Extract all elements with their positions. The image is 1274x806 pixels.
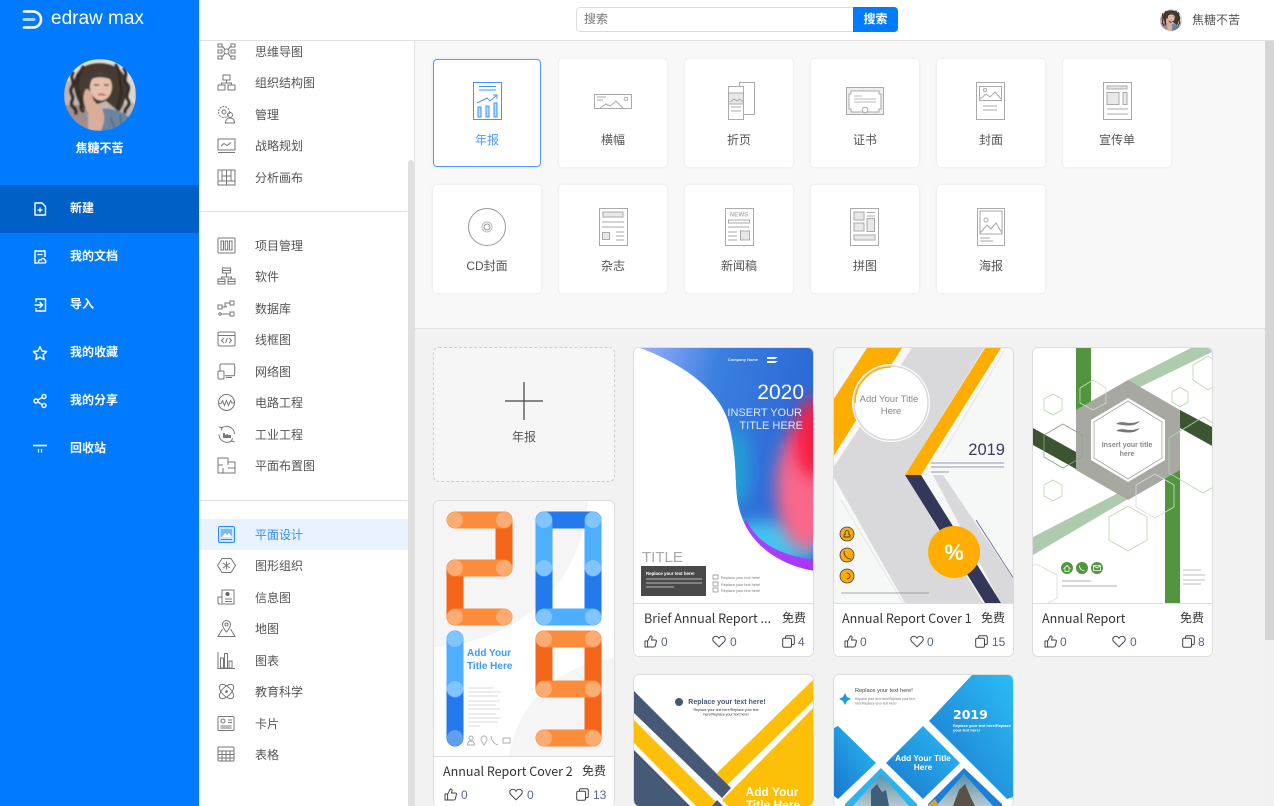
heart icon — [910, 636, 924, 648]
type card: collage: 拼图 — [853, 259, 877, 273]
poster: blue diamonds: here!Replace your text here! — [855, 702, 897, 706]
menu item: new (active): 新建 — [70, 201, 94, 215]
poster: gradient cover: TITLE — [642, 549, 683, 566]
nav item: charts: 图表 — [255, 654, 279, 668]
menu item: recycle bin: 回收站 — [70, 441, 106, 455]
poster: gradient cover: Replace your text here! — [721, 576, 760, 580]
price: 免费 — [782, 611, 806, 625]
poster: blue diamonds: 2019 — [953, 707, 988, 722]
nav item: floor plan: 平面布置图 — [255, 459, 315, 473]
nav item: map: 地图 — [255, 622, 279, 636]
type card: brochure: 折页 — [727, 133, 751, 147]
nav item: org chart: 组织结构图 — [255, 76, 315, 90]
menu item: shared: 我的分享 — [70, 393, 118, 407]
menu item: favorites — [32, 345, 118, 360]
nav item: industrial engineering: 工业工程 — [255, 428, 303, 442]
nav item: graphic design (active): 平面设计 — [255, 528, 303, 542]
copy icon — [782, 635, 795, 648]
nav item: card — [218, 716, 279, 731]
card footer — [1033, 603, 1212, 657]
copy icon — [975, 635, 988, 648]
nav item: network diagram — [218, 364, 291, 380]
template name: Annual Report Cover 1 — [842, 608, 972, 627]
poster: gradient cover — [638, 348, 813, 596]
nav item: strategy: 战略规划 — [255, 139, 303, 153]
type card: poster — [937, 185, 1045, 293]
like count: 0 — [661, 635, 668, 649]
price: 免费 — [582, 764, 606, 778]
poster: yellow and slate stripes: Add Your — [746, 785, 799, 799]
nav item: card: 卡片 — [255, 717, 279, 731]
nav item: management: 管理 — [255, 108, 279, 122]
template name: Annual Report Cover 2 — [443, 761, 573, 780]
nav item: mind map: 思维导图 — [255, 45, 303, 59]
nav item: project management: 项目管理 — [255, 239, 303, 253]
scrollbar — [408, 160, 414, 806]
header bar — [199, 0, 1274, 41]
poster: blue diamonds: Replace your text here!Replace — [953, 723, 1012, 728]
menu item: import — [34, 297, 94, 312]
nav item: analysis canvas — [218, 170, 303, 186]
user avatar — [64, 59, 136, 131]
like icon — [1044, 636, 1057, 648]
header user name: 焦糖不苦 — [1192, 13, 1240, 27]
poster: blue diamonds: Replace your text here! — [855, 688, 913, 694]
nav item: analysis canvas: 分析画布 — [255, 171, 303, 185]
price: 免费 — [1180, 611, 1204, 625]
poster: green hexagon cover: here — [1120, 451, 1134, 458]
poster: yellow and slate stripes — [634, 675, 813, 806]
poster: orange chevron cover: 2019 — [968, 441, 1005, 459]
copy count: 13 — [593, 788, 606, 802]
poster: blue diamonds — [834, 675, 1013, 806]
type card: collage — [811, 185, 919, 293]
type card: cover — [937, 59, 1045, 167]
poster: gradient cover: Replace your text here! — [721, 589, 760, 593]
search button — [853, 7, 898, 32]
panel: template gallery background — [415, 329, 1265, 806]
poster: gradient cover: Replace your text here! — [721, 583, 760, 587]
poster: 2019 number cover: Add Your — [467, 648, 511, 659]
like icon — [844, 636, 857, 648]
type card: press release — [685, 185, 793, 293]
favorite count: 0 — [1130, 635, 1137, 649]
template name: Brief Annual Report ... — [644, 608, 771, 627]
menu item: my documents: 我的文档 — [70, 249, 118, 263]
menu item: new (active) — [0, 185, 199, 233]
price: 免费 — [981, 611, 1005, 625]
poster: blue diamonds: Here — [914, 762, 933, 772]
poster: gradient cover: INSERT YOUR — [727, 407, 802, 419]
type card: banner: 横幅 — [601, 133, 625, 147]
search button: 搜索 — [863, 12, 888, 26]
poster: gradient cover: Company Name — [728, 357, 759, 362]
type card: flyer: 宣传单 — [1099, 133, 1135, 147]
template card: Annual Report Cover 1 — [833, 347, 1014, 657]
poster: 2019 number cover — [434, 501, 614, 756]
poster: green hexagon cover: Insert your title — [1102, 442, 1152, 449]
new blank template card — [433, 347, 615, 482]
nav item: science education: 教育科学 — [255, 685, 303, 699]
template card: Annual Report Cover 2 — [433, 500, 615, 806]
template card: Brief Annual Report — [633, 347, 814, 657]
copy count: 8 — [1198, 635, 1205, 649]
card footer — [434, 756, 614, 806]
like count: 0 — [860, 635, 867, 649]
new card label: 年报 — [512, 430, 536, 444]
nav item: software: 软件 — [255, 270, 279, 284]
search input: 搜索 — [584, 12, 608, 26]
favorite count: 0 — [730, 635, 737, 649]
nav item: science education — [218, 684, 303, 700]
like icon — [644, 636, 657, 648]
nav item: mind map — [218, 44, 303, 60]
heart icon — [712, 636, 726, 648]
type card: CD cover: CD封面 — [466, 259, 508, 273]
panel: template type picker — [415, 41, 1265, 329]
template name: Annual Report — [1042, 608, 1125, 627]
panel: left sidebar — [0, 0, 199, 806]
logo: edraw max: edraw max — [51, 8, 144, 29]
poster: orange chevron cover: Here — [881, 406, 901, 417]
page scrollbar — [1265, 41, 1274, 806]
nav item: infographic — [218, 590, 291, 605]
like icon — [444, 788, 457, 800]
nav item: industrial engineering — [218, 426, 303, 443]
type card: certificate — [811, 59, 919, 167]
heart icon — [1112, 636, 1126, 648]
poster: orange chevron cover: % — [944, 540, 964, 565]
nav item: wireframe — [218, 332, 291, 347]
nav item: graphic organizer: 图形组织 — [255, 559, 303, 573]
nav item: wireframe: 线框图 — [255, 333, 291, 347]
nav item: project management — [218, 238, 303, 254]
nav item: database — [218, 300, 291, 316]
type card: banner — [559, 59, 667, 167]
like count: 0 — [1060, 635, 1067, 649]
poster: gradient cover: TITLE HERE — [739, 420, 803, 432]
type card: magazine: 杂志 — [601, 259, 625, 273]
type card: brochure — [685, 59, 793, 167]
nav item: software — [218, 268, 279, 284]
nav item: table: 表格 — [255, 748, 279, 762]
copy count: 15 — [992, 635, 1005, 649]
search input — [576, 7, 854, 32]
poster: blue diamonds: your text here! — [953, 728, 980, 732]
like count: 0 — [461, 788, 468, 802]
type card: flyer — [1063, 59, 1171, 167]
nav item: strategy — [218, 138, 303, 153]
template card: yellow diagonal poster — [633, 674, 814, 806]
nav item: table — [218, 746, 279, 762]
poster: green hexagon cover — [1033, 348, 1212, 603]
poster: gradient cover: 2020 — [757, 381, 804, 404]
nav item: charts — [218, 652, 279, 669]
nav item: management — [218, 106, 279, 124]
poster: orange chevron cover — [834, 348, 1013, 603]
menu item: shared — [33, 393, 118, 408]
poster: blue diamonds: Add Your Title — [895, 753, 951, 763]
favorite count: 0 — [527, 788, 534, 802]
copy icon — [1182, 635, 1195, 648]
poster: blue diamonds: Replace your text here!Replace your text — [855, 697, 915, 701]
poster: yellow and slate stripes: Replace your text here! — [688, 699, 766, 706]
card footer — [834, 603, 1013, 657]
nav item: map — [217, 620, 279, 637]
menu item: recycle bin — [33, 441, 106, 455]
menu item: import: 导入 — [70, 297, 94, 311]
template card: Annual Report — [1032, 347, 1213, 657]
copy count: 4 — [798, 635, 805, 649]
nav item: circuit engineering: 电路工程 — [255, 396, 303, 410]
card footer — [634, 603, 813, 657]
favorite count: 0 — [927, 635, 934, 649]
type card: press release: 新闻稿 — [721, 259, 757, 273]
header avatar — [1160, 9, 1182, 31]
nav item: database: 数据库 — [255, 302, 291, 316]
nav item: network diagram: 网络图 — [255, 365, 291, 379]
poster: orange chevron cover: Add Your Title — [860, 394, 918, 405]
copy icon — [576, 788, 589, 801]
type card: poster: 海报 — [979, 259, 1003, 273]
nav item: graphic organizer — [217, 558, 303, 573]
menu item: favorites: 我的收藏 — [70, 345, 118, 359]
nav item: floor plan — [218, 458, 315, 474]
user name: 焦糖不苦 — [75, 141, 124, 155]
poster: yellow and slate stripes: here!Replace your text here! — [703, 712, 749, 716]
panel: category navigation — [199, 41, 415, 806]
type card: cover: 封面 — [979, 133, 1003, 147]
poster: yellow and slate stripes: Replace your text here!Replace your text — [693, 708, 759, 712]
type card: annual report (selected) — [433, 59, 541, 167]
type card: certificate: 证书 — [853, 133, 877, 147]
poster: gradient cover: Replace your text here! — [646, 571, 695, 576]
nav item: org chart — [218, 74, 315, 90]
nav item: circuit engineering — [218, 394, 303, 411]
nav item: infographic: 信息图 — [255, 591, 291, 605]
template card: blue diamond poster — [833, 674, 1014, 806]
icon: plus — [505, 382, 543, 420]
type card: CD cover — [433, 185, 541, 293]
type card: magazine — [559, 185, 667, 293]
type card: press release: NEWS — [730, 212, 748, 218]
poster: 2019 number cover: Title Here — [467, 661, 513, 672]
nav item: graphic design (active) — [199, 519, 408, 550]
menu item: my documents — [34, 249, 118, 264]
heart icon — [509, 788, 523, 801]
type card: annual report (selected): 年报 — [475, 133, 499, 147]
